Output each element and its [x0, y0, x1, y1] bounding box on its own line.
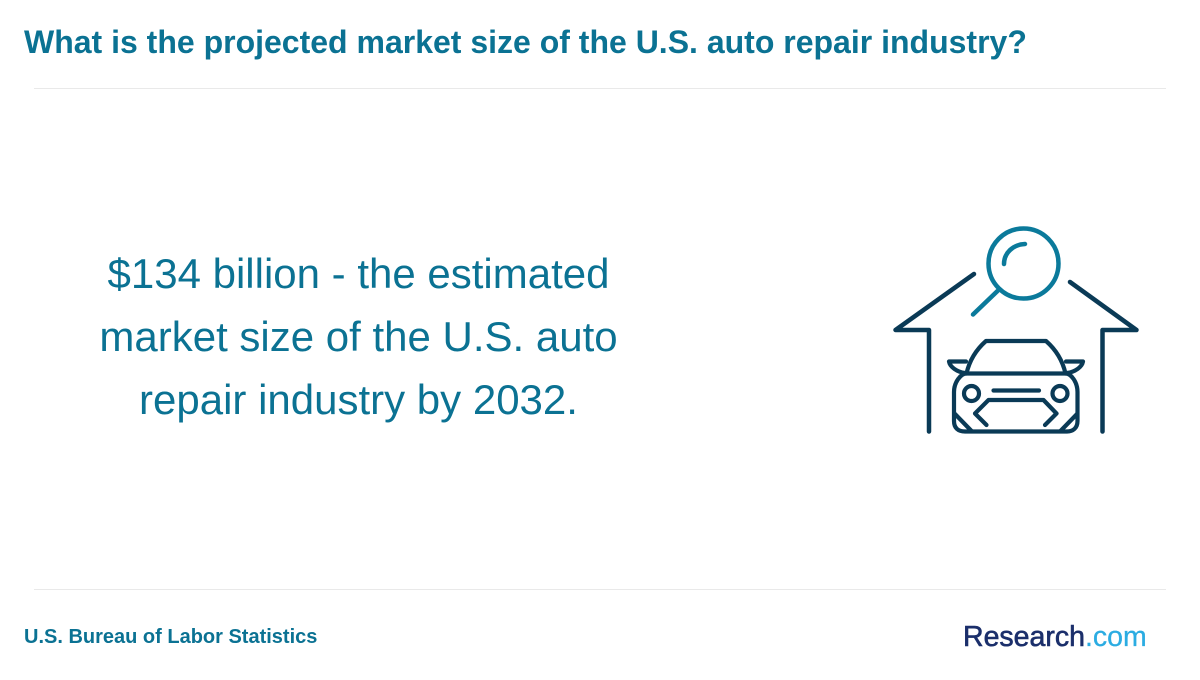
icon: magnifying glass [973, 228, 1058, 314]
icon: car [949, 341, 1083, 432]
main statement: repair industry by 2032. [139, 376, 578, 423]
title: What is the projected market size of the U.S. auto repair industry? [24, 24, 1027, 60]
logo: Research.com [963, 621, 1147, 653]
icon: car in garage with magnifying glass [893, 226, 1139, 434]
main statement [99, 250, 618, 423]
main statement: $134 billion - the estimated [108, 250, 609, 297]
main statement: market size of the U.S. auto [99, 313, 618, 360]
source: U.S. Bureau of Labor Statistics [24, 626, 317, 648]
icon: garage outline [896, 274, 1136, 432]
